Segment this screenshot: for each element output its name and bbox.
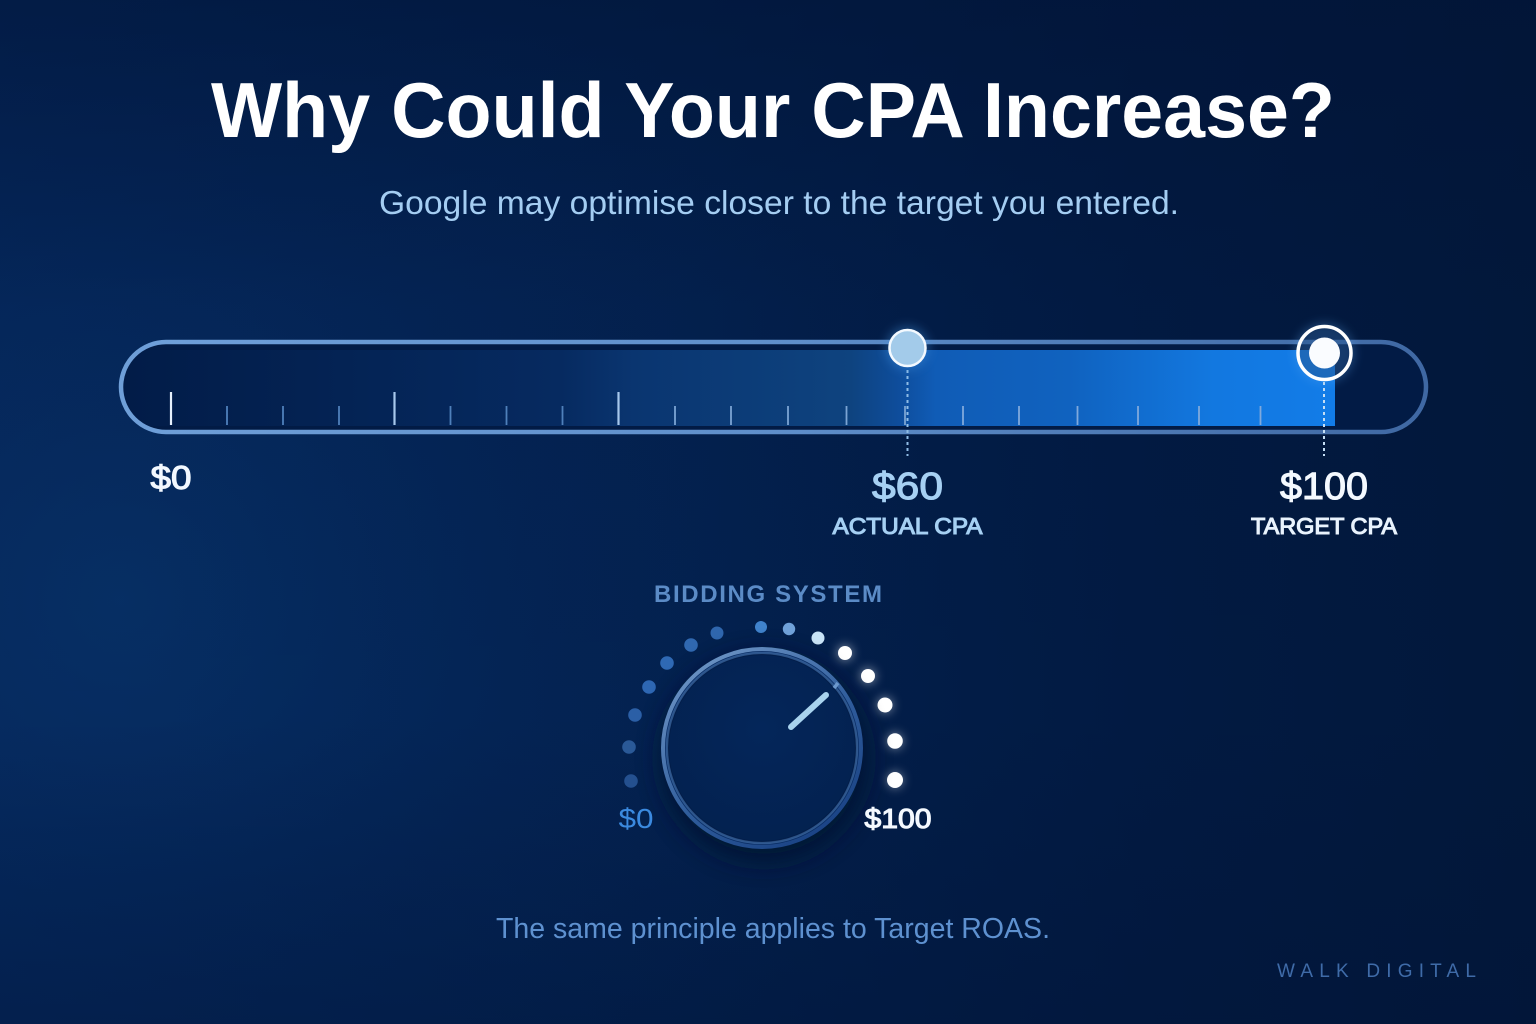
track outline [121,342,1426,432]
track progress fill [121,350,1335,426]
dial dots [622,621,903,788]
target CPA label: TARGET CPA [1251,513,1398,539]
actual CPA marker [886,326,930,456]
target CPA label [1251,466,1398,539]
dial $0 label: $0 [618,803,654,834]
knob needle [791,695,826,727]
actual CPA label: $60 [872,466,943,508]
knob shadow [660,654,868,862]
actual CPA label [832,466,983,539]
CPA scale track [121,342,1426,432]
subtitle: Google may optimise closer to the target you entered. [379,184,1179,221]
footnote: The same principle applies to Target ROAS. [496,913,1050,945]
title: Why Could Your CPA Increase? [211,66,1335,154]
target CPA label: $100 [1280,466,1368,508]
knob [663,649,861,847]
dial $100 label: $100 [864,803,932,834]
dial [622,621,903,862]
scale ticks [171,392,1260,425]
knob ring marker [834,683,838,688]
brand mark: WALK DIGITAL [1277,961,1476,982]
bidding system heading: BIDDING SYSTEM [654,581,882,608]
$0 scale label: $0 [150,459,192,496]
target CPA marker [1294,323,1354,456]
actual CPA label: ACTUAL CPA [832,513,983,539]
track interior [121,342,1426,432]
